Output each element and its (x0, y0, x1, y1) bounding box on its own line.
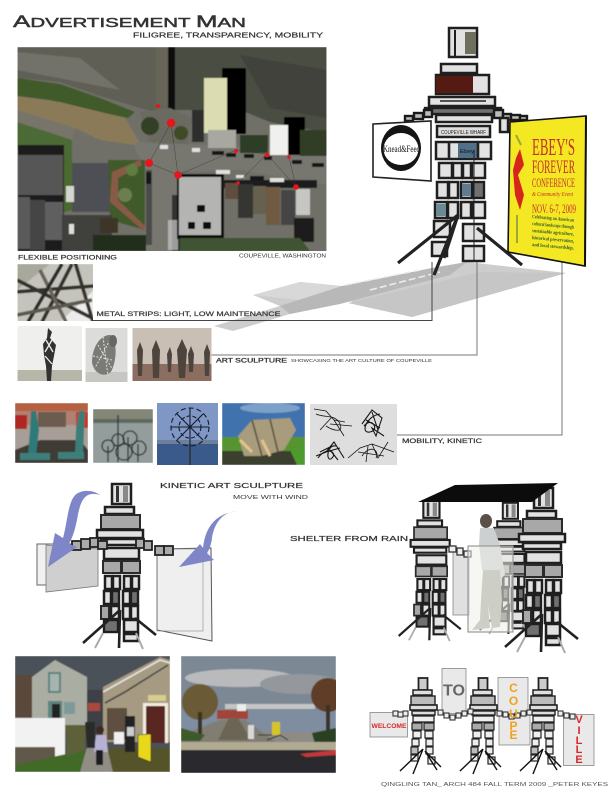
panel: VILLE (564, 714, 594, 766)
word: COUPE: C (509, 681, 518, 695)
heading: shelter from rain: SHELTER FROM RAIN (290, 534, 408, 543)
left figure (399, 501, 461, 641)
chain of linked arms (393, 709, 575, 720)
main advertisement man sculpture (373, 28, 587, 275)
left sign: Knead and Feed: Knead&Feed (383, 144, 420, 154)
yellow sign: Ebey's Forever Conference: and local stewardship. (532, 243, 575, 252)
sketches: kinetic figures (310, 404, 397, 465)
caption: art sculpture: ART SCULPTURE (216, 358, 288, 364)
yellow sign: Ebey's Forever Conference (508, 116, 587, 266)
wind arrow: left (48, 491, 100, 567)
link chain between figures (449, 546, 471, 557)
word: COUPE: E (509, 728, 518, 742)
photo: metal strips (18, 264, 93, 321)
shelter diagram (399, 483, 578, 653)
panel: TO (442, 668, 466, 714)
figure three (520, 678, 561, 774)
yellow sign: Ebey's Forever Conference: cultural landscape through (532, 222, 574, 231)
photo: group of sculptures (132, 328, 212, 381)
right figure (505, 488, 578, 653)
aerial caption: location: COUPEVILLE, WASHINGTON (239, 254, 326, 260)
heading: kinetic art sculpture: KINETIC ART SCULPTURE (160, 481, 303, 490)
middle figure (480, 503, 538, 635)
wind arrow: right (179, 511, 237, 567)
panel: COUPE upper (498, 678, 528, 716)
leader lines (93, 262, 562, 435)
photo: pinwheel sculpture (157, 403, 218, 465)
caption: showcasing the art culture: SHOWCASING THE ART CULTURE OF COUPEVILLE (291, 358, 432, 364)
yellow sign: Ebey's Forever Conference: historical preservation, (532, 236, 575, 245)
kinetic sculpture diagram (37, 484, 237, 649)
word: COUPE: O (509, 694, 518, 708)
figure one (400, 678, 441, 774)
cast shadow of the sculpture (214, 262, 566, 331)
word: WELCOME: WELCOME (372, 723, 407, 730)
sculpture figure (72, 484, 173, 649)
subtitle: FILIGREE, TRANSPARENCY, MOBILITY (133, 32, 323, 40)
panel: WELCOME (370, 712, 408, 737)
yellow sign: Ebey's Forever Conference: sustainable agriculture, (532, 229, 575, 238)
photo: sculpture at wharf (181, 656, 336, 773)
caption: mobility, kinetic: MOBILITY, KINETIC (402, 438, 483, 445)
word: VILLE: V (575, 714, 583, 726)
word: COUPE (509, 681, 518, 742)
photo: timber pavilion (222, 403, 305, 465)
word: TO: TO (443, 682, 465, 700)
subheading: move with wind: MOVE WITH WIND (233, 495, 308, 501)
head and body frames: COUPEVILLE WHARF (441, 130, 486, 136)
word: VILLE: L (576, 744, 583, 756)
photo: sculpture on street with houses (15, 656, 170, 772)
tripod legs (398, 215, 522, 275)
photo: crouching sculpture (86, 328, 128, 382)
figure two (460, 678, 501, 774)
person (472, 514, 505, 630)
head and body frames (405, 28, 527, 262)
head and body frames: Ebey (460, 149, 475, 155)
back panel (453, 552, 469, 615)
credits line: QINGLING TAN_ ARCH 484 FALL TERM 2009 _PETER KEYES (381, 782, 608, 788)
translucent front panel (468, 546, 513, 632)
yellow sign: Ebey's Forever Conference: & Community Event (532, 192, 573, 198)
yellow sign: Ebey's Forever Conference: EBEY'S (532, 135, 575, 161)
title: A DVERTISEMENT M AN (13, 13, 246, 31)
left sign: Knead and Feed (373, 121, 431, 181)
caption: metal strips: METAL STRIPS: LIGHT, LOW MAINTENANCE (96, 311, 281, 318)
photo: reflected sculpture over water (93, 409, 153, 463)
left wind panel (37, 544, 98, 592)
word: COUPE: P (509, 719, 518, 733)
word: VILLE (575, 714, 583, 766)
arm chain (405, 110, 527, 121)
aerial site map (18, 47, 326, 251)
aerial caption: flexible positioning: FLEXIBLE POSITIONING (18, 254, 117, 262)
panel: COUPE lower (499, 715, 530, 745)
yellow sign: Ebey's Forever Conference: Celebrating an American (532, 215, 574, 224)
right wind panel (157, 548, 212, 641)
welcome to Coupeville sculptures (370, 668, 594, 774)
word: VILLE: L (576, 735, 583, 747)
photo: standing sculpture (18, 326, 82, 381)
word: VILLE: I (577, 725, 581, 737)
photo: teal statues (15, 403, 88, 463)
roof (418, 483, 558, 502)
word: VILLE: E (575, 754, 583, 766)
word: COUPE: U (509, 707, 518, 721)
